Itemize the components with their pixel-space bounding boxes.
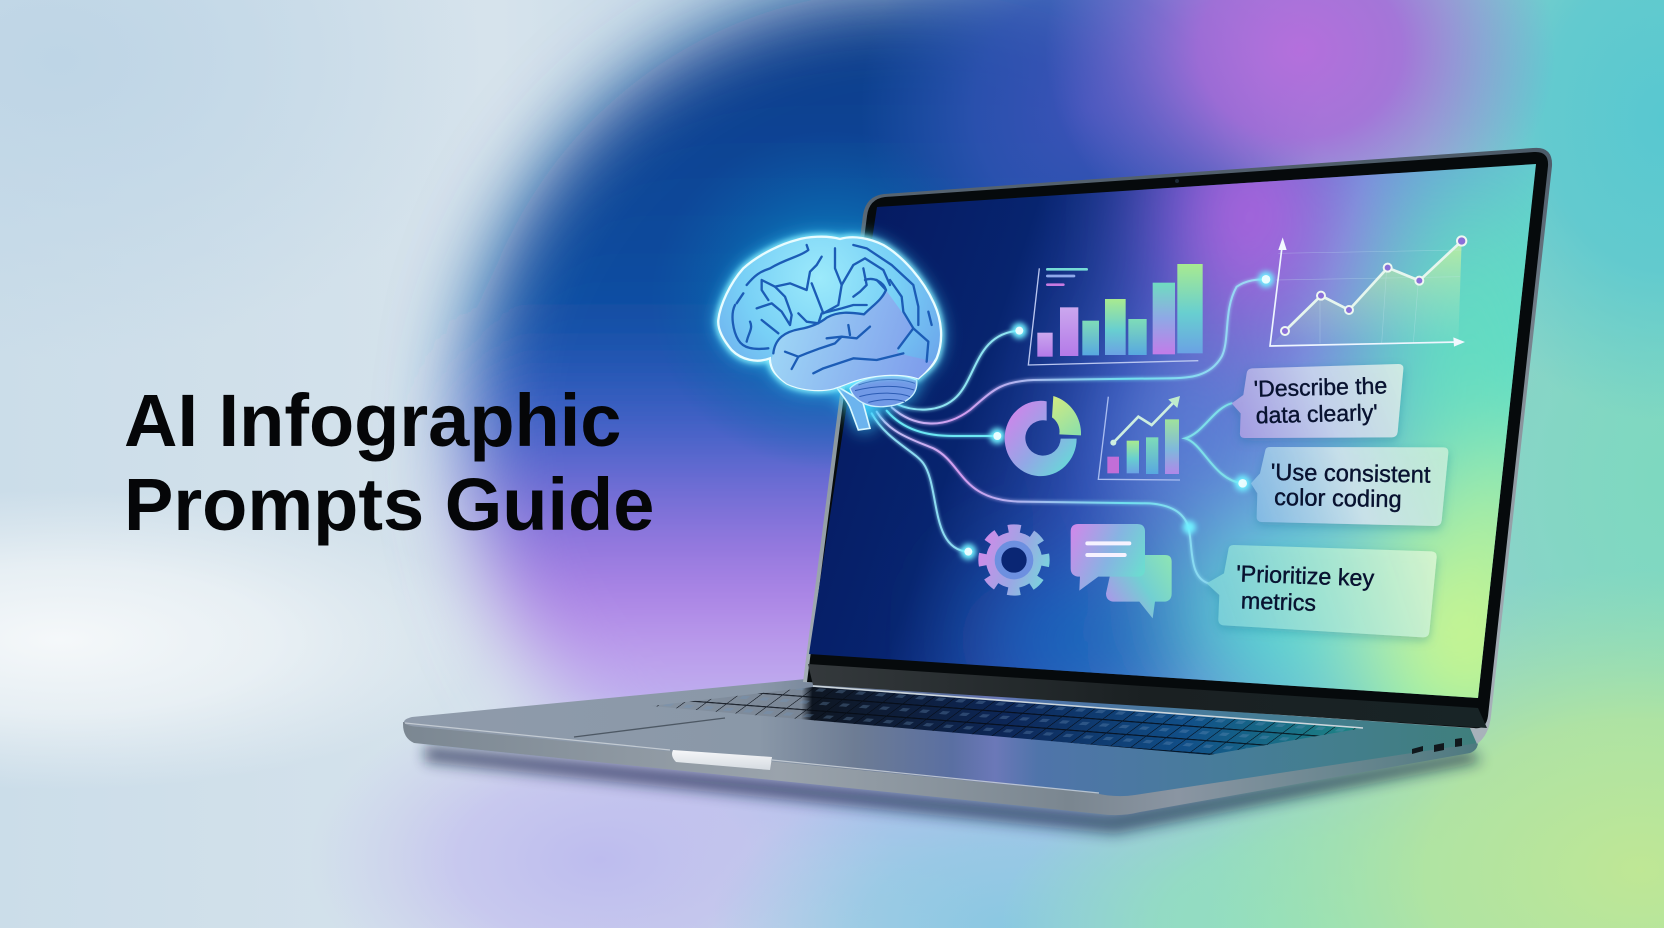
laptop base xyxy=(403,679,1489,815)
screen graphics xyxy=(718,236,1466,637)
callout: describe the data clearly xyxy=(1232,364,1403,438)
brain icon xyxy=(718,237,941,430)
side ports xyxy=(1412,738,1462,754)
camera xyxy=(1175,179,1179,183)
trackpad line xyxy=(574,718,725,737)
laptop xyxy=(403,100,1570,834)
title xyxy=(124,379,654,546)
callout: use consistent color coding: color coding xyxy=(1274,485,1402,513)
cerebellum xyxy=(850,375,917,407)
chat bubbles icon xyxy=(1071,524,1172,618)
cerebrum xyxy=(718,237,941,390)
callout: prioritize key metrics xyxy=(1207,545,1437,637)
brain glow xyxy=(718,237,941,430)
donut chart xyxy=(1005,396,1081,476)
prompt callouts xyxy=(1207,364,1448,637)
laptop screen xyxy=(809,164,1536,698)
callout: use consistent color coding: 'Use consistent xyxy=(1271,460,1431,489)
callout: describe the data clearly: 'Describe the xyxy=(1253,372,1388,402)
temporal lobe xyxy=(772,290,933,390)
brain folds xyxy=(733,245,932,373)
small trend chart xyxy=(1098,396,1180,480)
laptop shadow xyxy=(425,745,1482,834)
line chart xyxy=(1270,236,1466,347)
keyboard xyxy=(651,686,1363,755)
title: AI Infographic xyxy=(124,379,621,462)
bar chart xyxy=(1028,264,1203,365)
glow nodes xyxy=(960,271,1274,560)
callout: prioritize key metrics: metrics xyxy=(1240,587,1317,616)
title: Prompts Guide xyxy=(124,463,654,546)
gear icon xyxy=(983,529,1045,591)
front notch xyxy=(672,750,772,770)
brain stem xyxy=(835,385,870,430)
callout: use consistent color coding xyxy=(1251,447,1448,526)
callout: describe the data clearly: data clearly' xyxy=(1255,399,1378,428)
laptop lid xyxy=(803,148,1552,744)
brain outline glow xyxy=(718,237,941,390)
connector wires xyxy=(872,279,1266,583)
callout: prioritize key metrics: 'Prioritize key xyxy=(1236,560,1375,591)
